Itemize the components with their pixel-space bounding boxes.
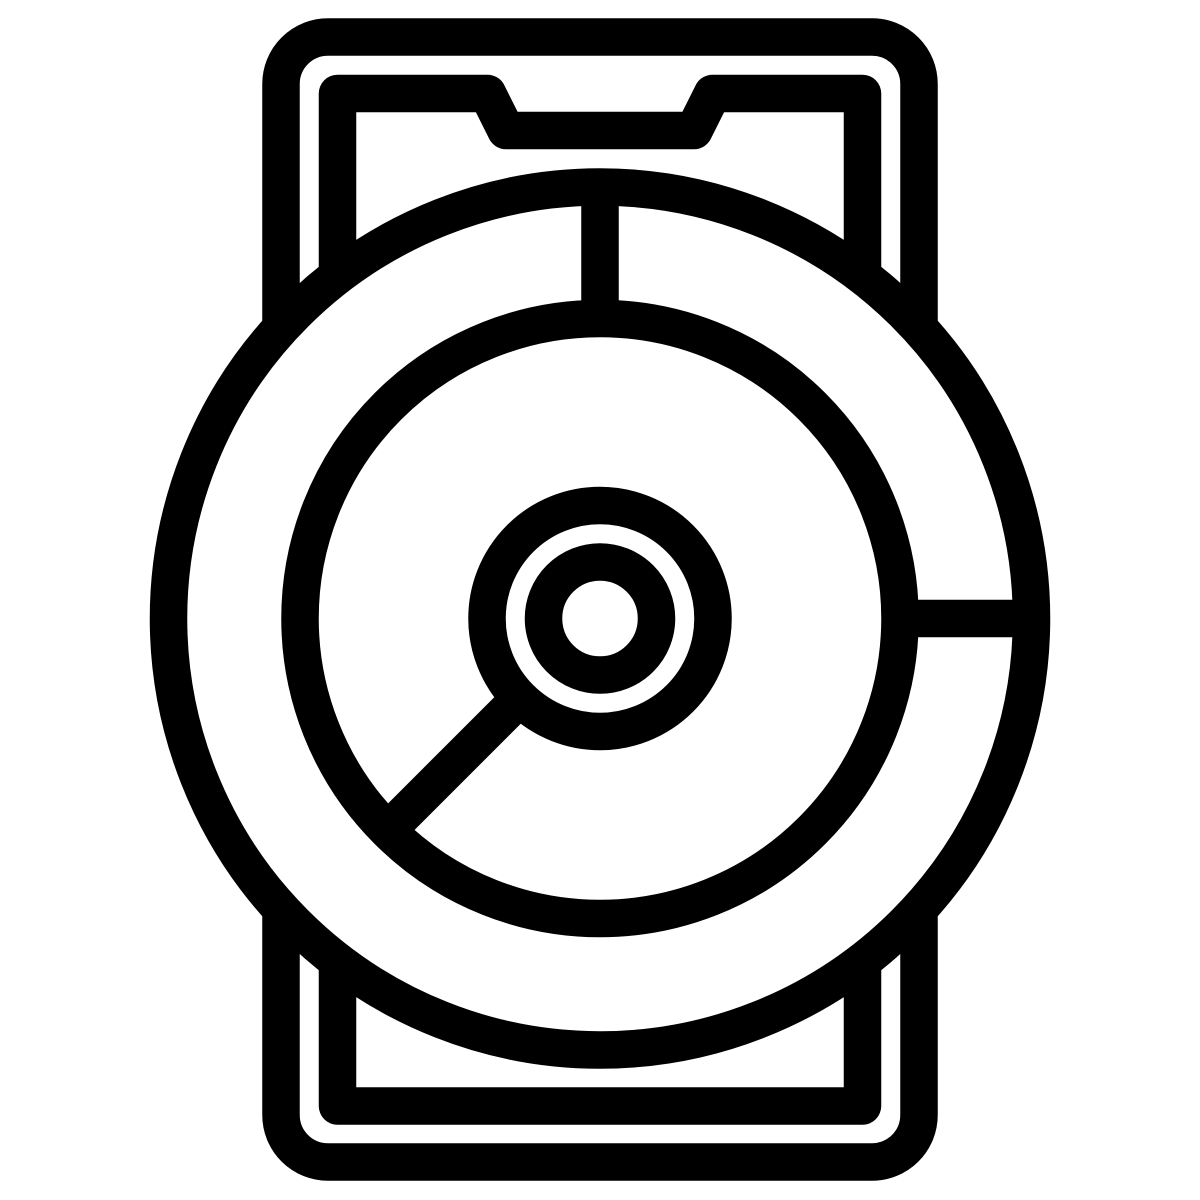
top connector — [581, 187, 619, 318]
phone outer body — [281, 37, 919, 1162]
hub inner ring — [544, 562, 656, 675]
right connector — [900, 600, 1031, 637]
diagonal connector — [388, 710, 508, 830]
outer ring — [168, 187, 1032, 1050]
hub outer ring — [487, 506, 713, 732]
inner ring — [300, 318, 900, 918]
phone screen with notch — [338, 94, 862, 1106]
